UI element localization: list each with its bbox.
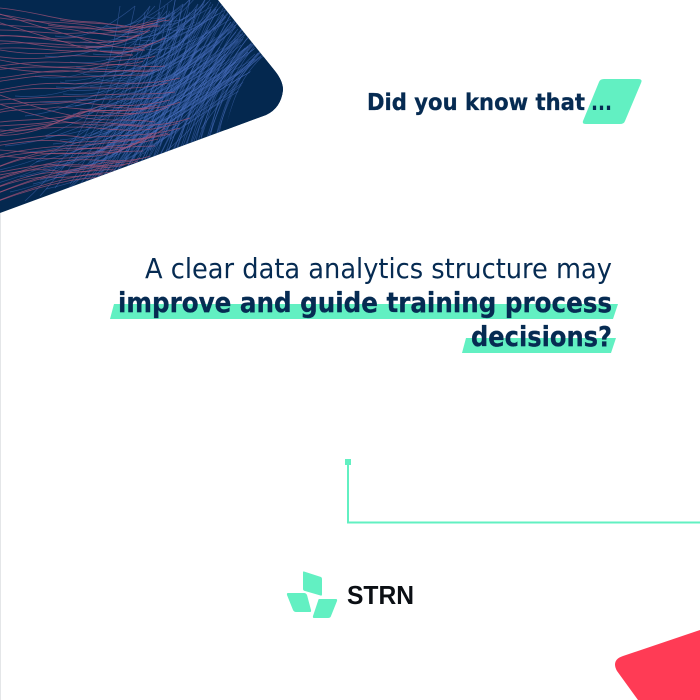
highlight: mint band line one — [110, 304, 618, 319]
main statement — [110, 252, 618, 353]
logo: STRN — [287, 571, 414, 618]
statement text bold line one: improve and guide training process — [118, 286, 612, 319]
panel: red corner shape — [615, 630, 700, 700]
connector line with square node — [345, 459, 700, 522]
pink flowing lines — [0, 8, 190, 200]
heading text: Did you know that — [367, 90, 585, 116]
dark corner cover — [226, 57, 283, 130]
statement text light: A clear data analytics structure may — [145, 252, 612, 285]
logo wordmark: STRN — [347, 580, 414, 610]
statement text bold line two: decisions? — [471, 320, 612, 353]
blue flowing lines — [40, 0, 268, 195]
highlight: mint band line two — [462, 338, 616, 353]
ellipsis: ... — [591, 90, 612, 116]
icon: mint parallelogram highlight — [583, 79, 642, 124]
icon: three mint tiles — [287, 571, 337, 618]
panel: dark network-lines corner shape — [0, 0, 290, 220]
heading: did you know that — [367, 79, 642, 124]
